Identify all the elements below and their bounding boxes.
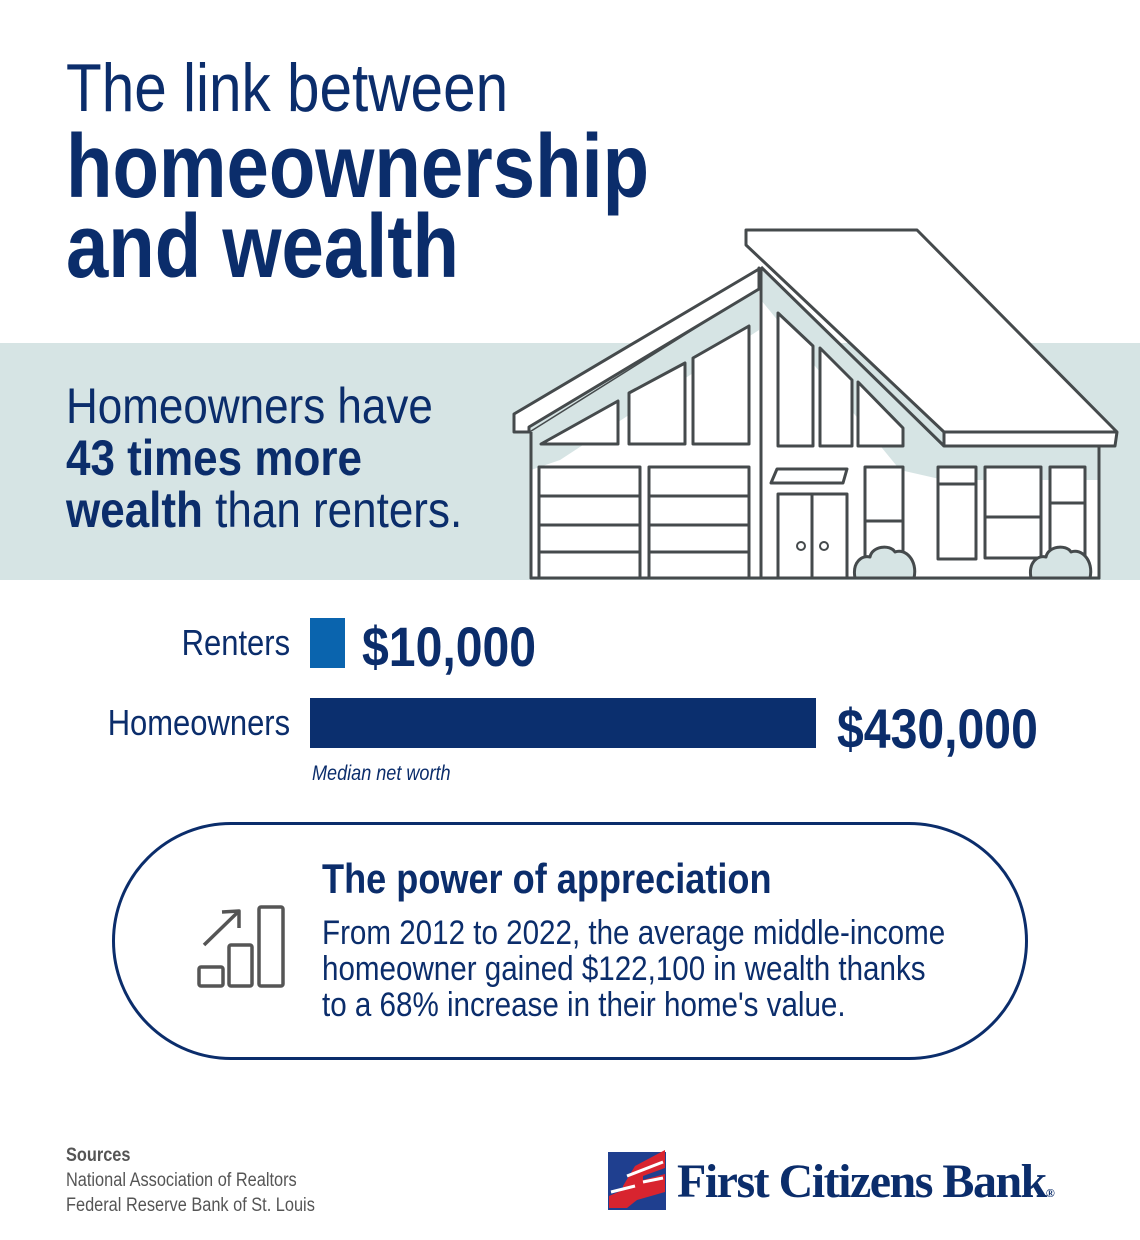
callout text	[322, 914, 945, 1024]
title: The link between	[66, 50, 508, 126]
background band	[0, 343, 1140, 580]
value homeowners: $430,000	[837, 697, 1038, 760]
logo: First Citizens Bank: First Citizens Bank®	[677, 1155, 1053, 1208]
door	[771, 469, 847, 483]
sources: Sources	[66, 1145, 130, 1166]
bushes	[854, 547, 915, 578]
gable windows	[541, 401, 618, 444]
callout heading: The power of appreciation	[322, 855, 772, 902]
title: and wealth	[66, 197, 459, 297]
icon: growth chart	[197, 905, 285, 988]
callout: power of appreciation	[112, 822, 1028, 1060]
sources: Federal Reserve Bank of St. Louis	[66, 1195, 315, 1216]
illustration: house	[512, 228, 1118, 580]
title	[66, 50, 649, 297]
callout text: to a 68% increase in their home's value.	[322, 986, 846, 1024]
garage doors	[539, 467, 640, 578]
windows	[865, 467, 903, 559]
subtitle text	[66, 378, 462, 538]
callout text: From 2012 to 2022, the average middle-income	[322, 914, 945, 952]
title: homeownership	[66, 117, 649, 217]
subtitle text: wealth than renters.	[66, 482, 462, 538]
label homeowners: Homeowners	[108, 702, 290, 743]
sources	[66, 1145, 315, 1216]
bar chart	[108, 615, 1038, 785]
bar homeowners	[310, 698, 816, 748]
icon: flag	[608, 1150, 666, 1210]
big roof	[746, 230, 1117, 446]
subtitle text: 43 times more	[66, 430, 362, 486]
left roof	[514, 269, 759, 432]
label renters: Renters	[182, 622, 290, 663]
subtitle text: Homeowners have	[66, 378, 433, 434]
bar renters	[310, 618, 345, 668]
walls	[531, 268, 1099, 578]
callout text: homeowner gained $122,100 in wealth thanks	[322, 950, 926, 988]
value renters: $10,000	[362, 615, 536, 678]
sources: National Association of Realtors	[66, 1170, 297, 1191]
axis note: Median net worth	[312, 762, 451, 785]
